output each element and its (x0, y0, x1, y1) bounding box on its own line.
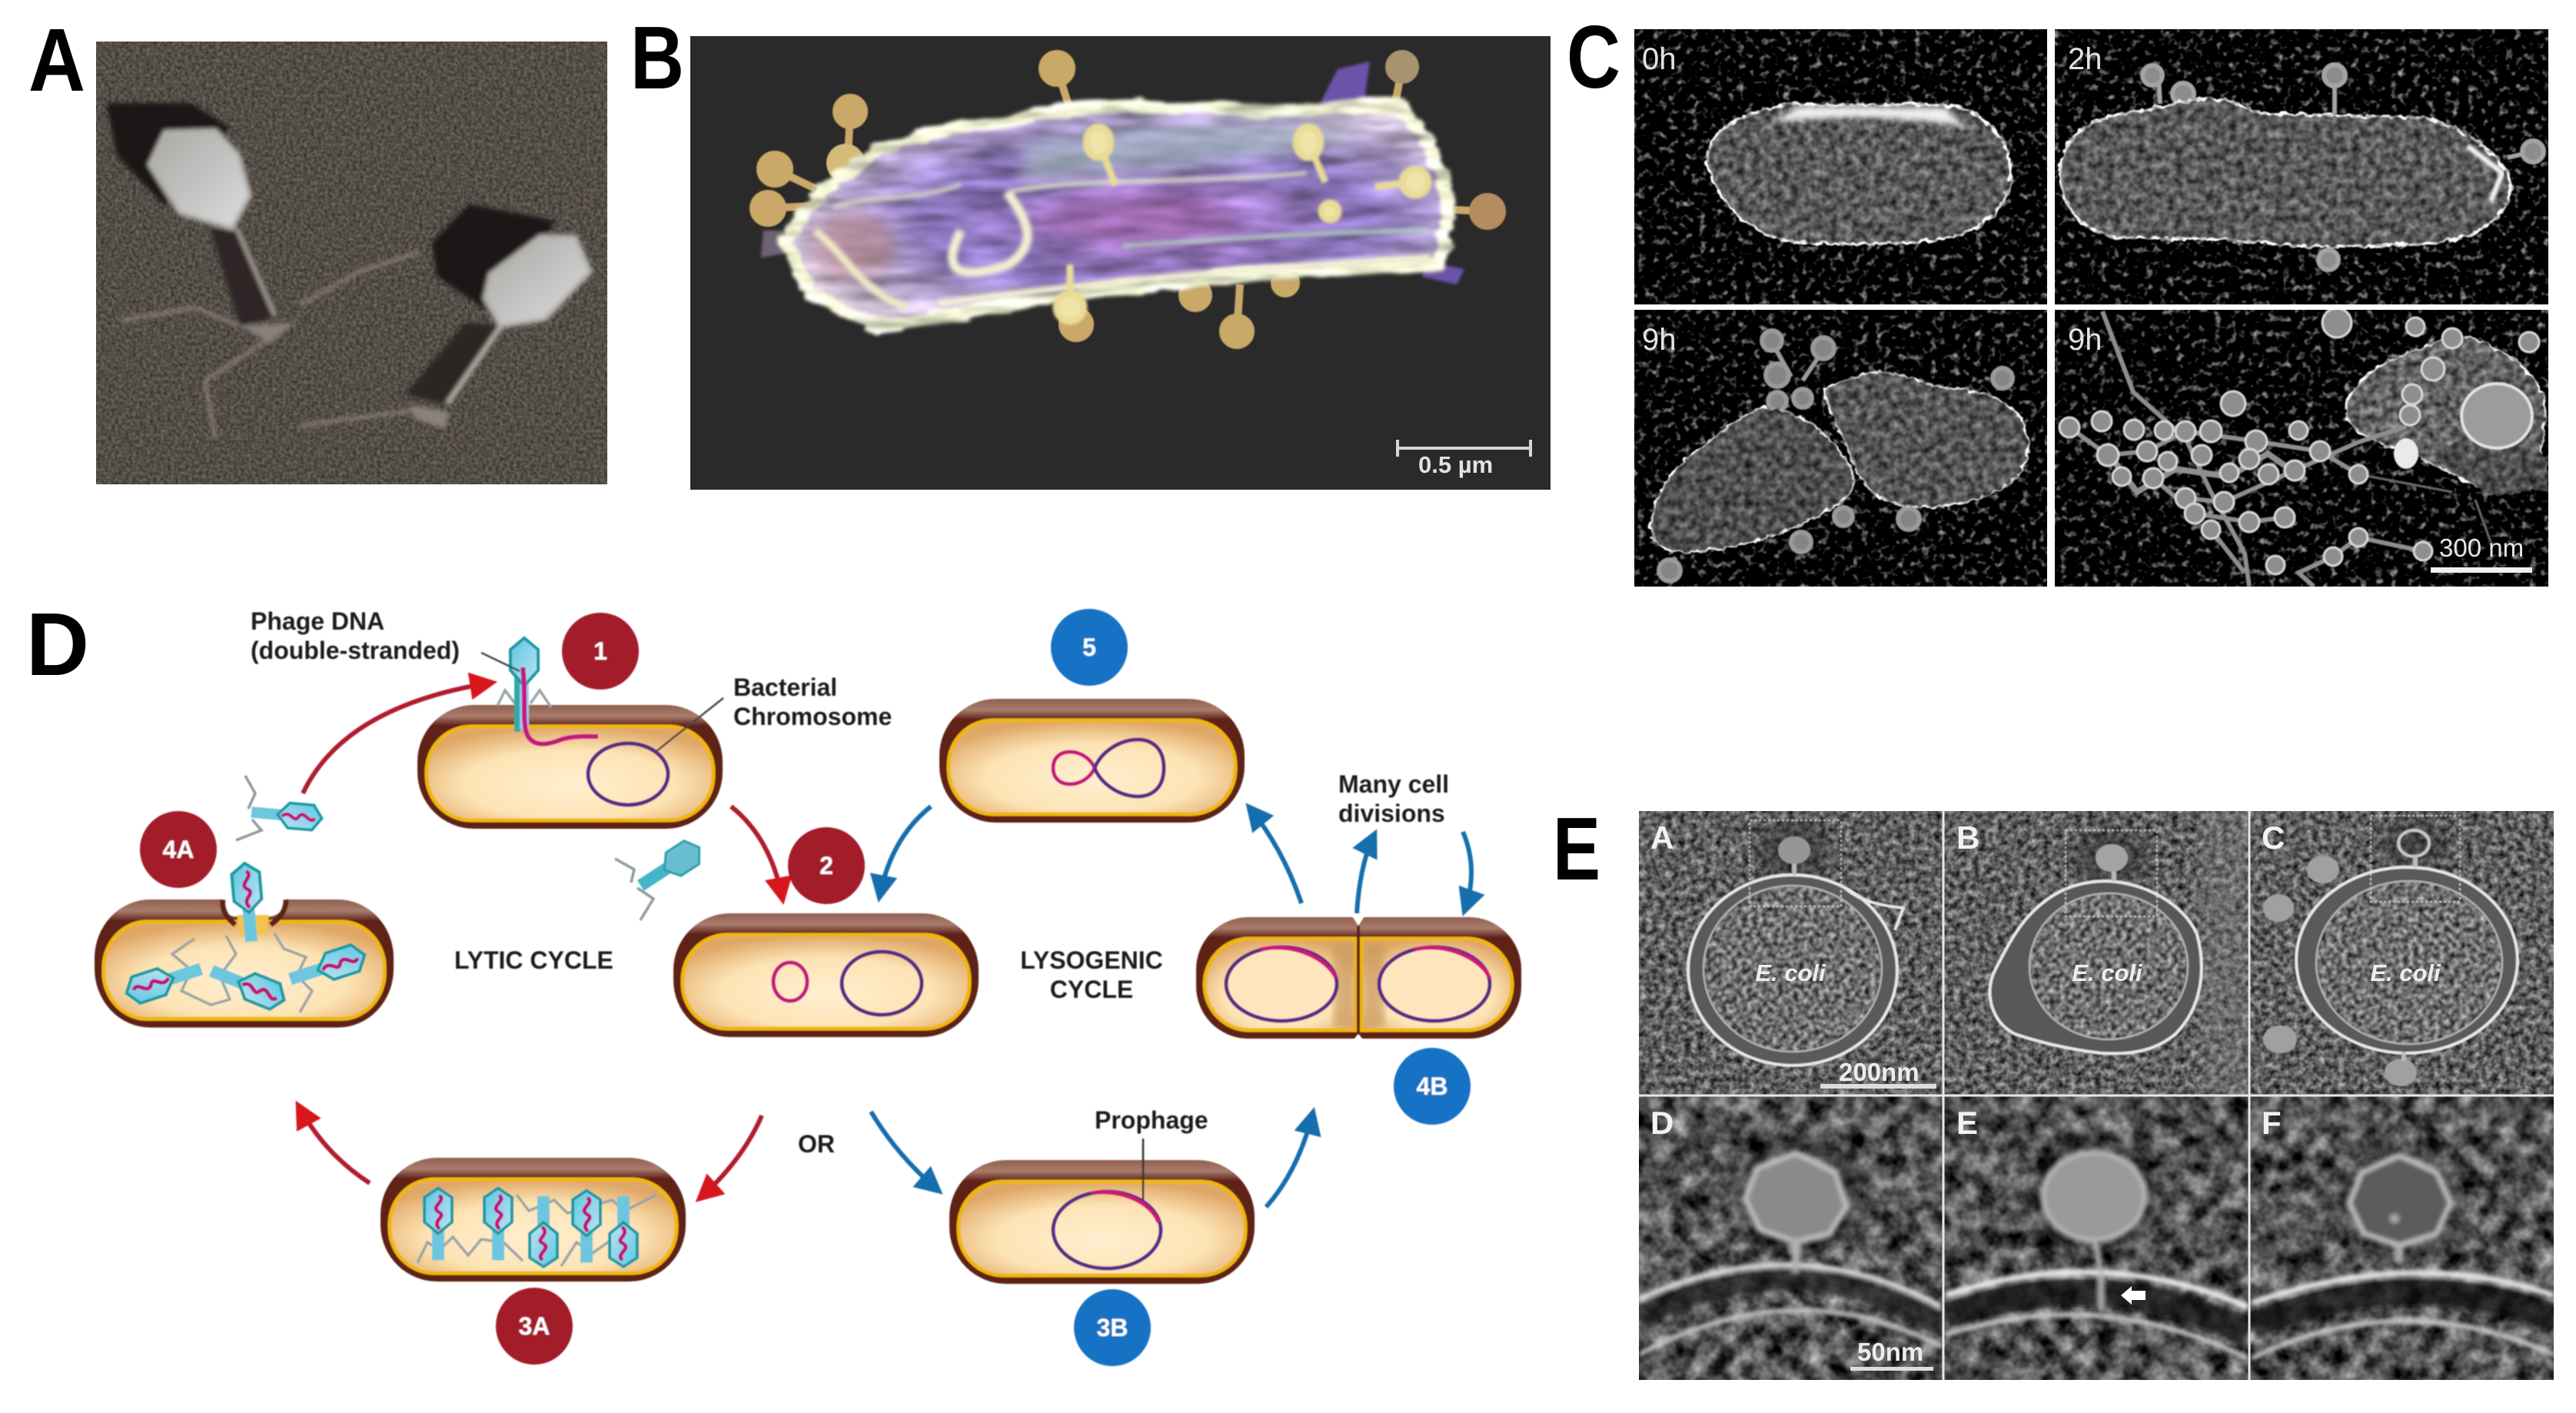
step badge 3B: 3B (1097, 1314, 1128, 1342)
arrows: lytic cycle (298, 683, 783, 1199)
panel letter E: E (1553, 799, 1600, 899)
frame B side stripe (2200, 811, 2248, 1095)
sub-panel 9h cells (1634, 310, 2047, 587)
label 9h: 9h (1642, 323, 1676, 357)
E. coli label B: E. coli (2072, 959, 2143, 986)
frame letter A: A (1650, 820, 1674, 856)
panel letter B: B (630, 8, 684, 108)
arrow marker in close-up E (2121, 1286, 2146, 1305)
frame letter B: B (1956, 820, 1979, 856)
label many cell divisions: divisions (1338, 800, 1445, 827)
panel letter C: C (1567, 7, 1620, 107)
sub-panel 0h (1634, 29, 2047, 304)
cell step 4B dividing (1196, 915, 1521, 1041)
phage 1 tail fibers (120, 252, 420, 439)
step badge 4A: 4A (163, 836, 194, 863)
free phage without DNA (615, 836, 706, 920)
panel A: electron micrograph of two phages (96, 42, 607, 484)
label 9h second: 9h (2068, 323, 2102, 357)
step badge 4B (1394, 1048, 1471, 1125)
bright detached fragment (2461, 384, 2532, 448)
scale bar 50nm (1850, 1338, 1933, 1371)
phage 2 baseplate (410, 405, 450, 429)
close-up D phage and membranes (1639, 1139, 1942, 1355)
step badge 1: 1 (593, 637, 607, 665)
front pale phages (1056, 127, 1428, 321)
step badge 3B (1074, 1289, 1151, 1366)
frame letter C: C (2262, 820, 2285, 856)
sub-panel 9h lysed (2055, 308, 2548, 587)
cell A (1688, 818, 1903, 1066)
step badge 1 (562, 613, 639, 690)
scale bar (1398, 440, 1531, 478)
phage 2 shadow (435, 208, 550, 309)
label prophage: Prophage (1095, 1106, 1208, 1134)
background top row (1639, 811, 2554, 1095)
label bacterial chromosome: Chromosome (733, 703, 892, 730)
phage 1 head (150, 131, 250, 228)
scale bar 200nm (1820, 1058, 1936, 1089)
sub-panel 2h (2055, 29, 2548, 304)
step badge 2 (788, 827, 865, 904)
cell step 4A bursting (95, 863, 394, 1028)
cell C (2263, 816, 2518, 1086)
phage 2 fiber (300, 410, 420, 426)
panel letter A: A (28, 10, 85, 110)
step badge 5 (1051, 609, 1128, 686)
phage 1 baseplate (240, 323, 295, 343)
cell step 3B with prophage (949, 1139, 1255, 1284)
scale bar 50nm: 50nm (1857, 1338, 1923, 1366)
label lysogenic cycle: LYSOGENIC (1020, 946, 1163, 974)
free phage leaving (236, 776, 323, 840)
E. coli label A: E. coli (1755, 959, 1826, 986)
E. coli label C: E. coli (2370, 959, 2441, 986)
panel letter D: D (26, 594, 89, 694)
cell B (1989, 827, 2202, 1054)
step badge 2: 2 (819, 852, 833, 879)
cell step 2 (673, 913, 979, 1037)
label bacterial chromosome: Bacterial (733, 673, 837, 701)
frame letter D: D (1650, 1105, 1674, 1141)
cell step 3A phage assembly (381, 1158, 686, 1282)
step badge 5: 5 (1082, 633, 1096, 661)
cell step 1 with infecting phage (417, 638, 723, 829)
rear purple fragments (761, 62, 1464, 332)
bacterium body (785, 106, 1451, 330)
panel C: SEM time series of phage infection (1634, 29, 2548, 587)
frame letter F: F (2262, 1105, 2282, 1141)
scale bar 300 nm: 300 nm (2439, 534, 2524, 562)
phage 2 tail (405, 323, 505, 405)
phage network strands (2069, 311, 2491, 587)
label 2h: 2h (2068, 42, 2102, 76)
label phage DNA: Phage DNA (251, 607, 384, 635)
close-up E phage, tail tube and arrow (1946, 1139, 2248, 1358)
phage 1 tail (210, 228, 280, 326)
close-up F empty capsid and membranes (2252, 1145, 2554, 1358)
arrows: lysogenic cycle (871, 806, 1471, 1207)
panel E: cryo-EM of phage on E. coli (1639, 811, 2554, 1380)
step badge 4B: 4B (1417, 1072, 1448, 1100)
cell step 5 with excising prophage (939, 699, 1245, 823)
label many cell divisions: Many cell (1338, 770, 1449, 798)
background bottom row (1639, 1095, 2554, 1380)
surface folds and highlights (811, 125, 1430, 308)
frame letter E: E (1956, 1105, 1978, 1141)
step badge 3A (496, 1288, 573, 1365)
phage 1 shadow (110, 106, 225, 202)
panel D: lytic and lysogenic cycle diagram (95, 607, 1521, 1366)
scale bar: 0.5 µm (1418, 451, 1493, 478)
label 0h: 0h (1642, 42, 1676, 76)
phage 2 head (485, 237, 590, 326)
outer gold phages (753, 54, 1502, 345)
white frame separators (1639, 811, 2554, 1380)
label or: OR (798, 1130, 835, 1158)
phage particles (2059, 308, 2539, 574)
label phage DNA: (double-stranded) (251, 637, 460, 664)
scale bar 300 nm (2431, 534, 2532, 573)
scale bar 200nm: 200nm (1839, 1058, 1920, 1086)
label lysogenic cycle: CYCLE (1050, 976, 1133, 1003)
panel B: coloured phages on a bacterium (690, 36, 1551, 490)
step badge 4A (140, 811, 217, 888)
label lytic cycle: LYTIC CYCLE (454, 946, 613, 974)
step badge 3A: 3A (519, 1312, 550, 1340)
